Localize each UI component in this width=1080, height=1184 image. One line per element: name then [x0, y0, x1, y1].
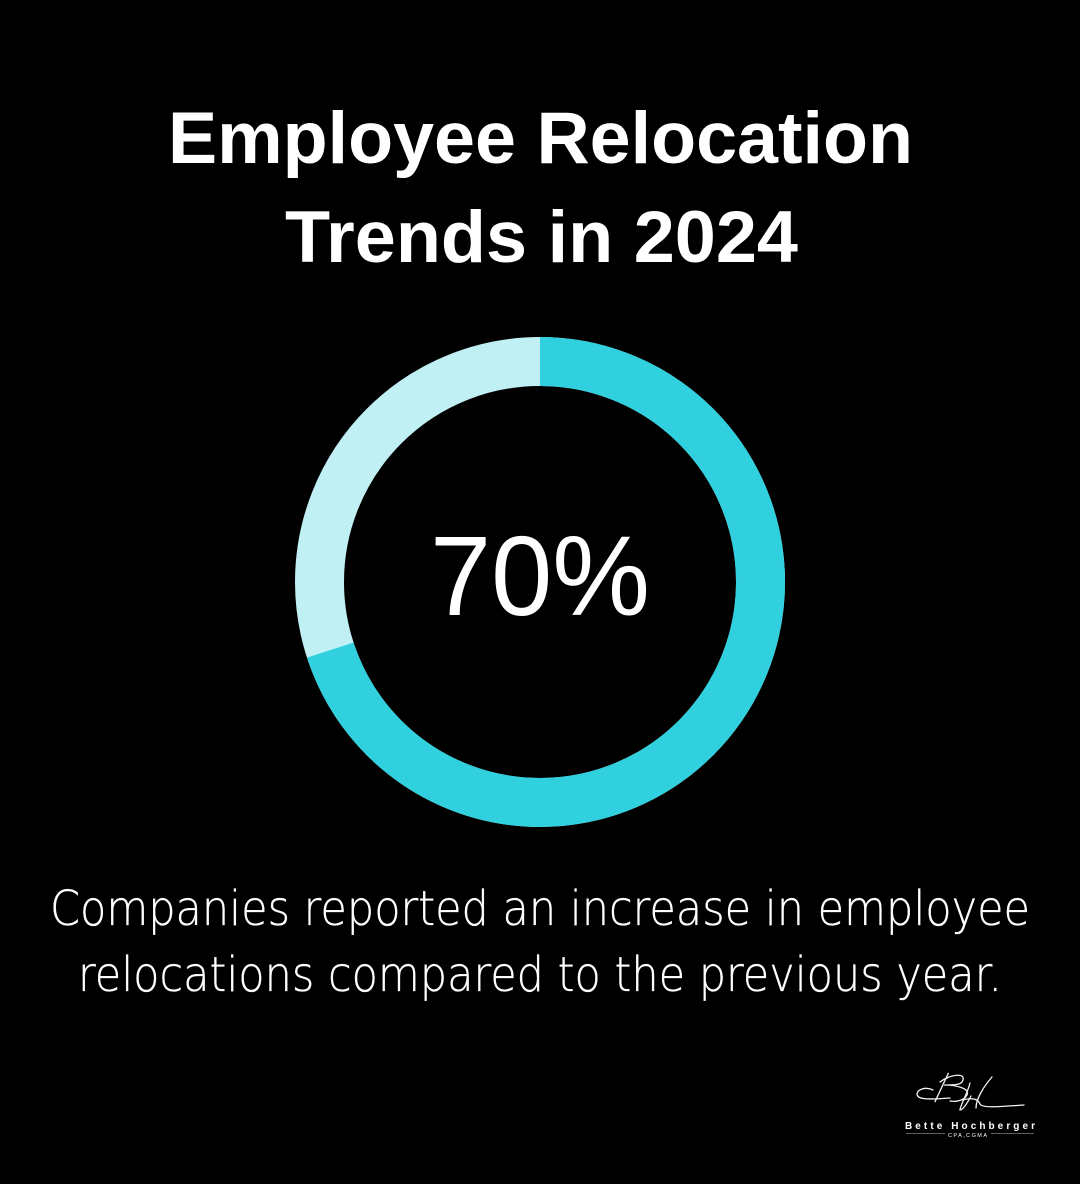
description text [50, 881, 1030, 1003]
logo: Bette Hochberger signature: Bette Hochberger [905, 1121, 1035, 1132]
title: Employee Relocation [168, 98, 913, 179]
logo: Bette Hochberger signature: CPA,CGMA [948, 1133, 987, 1139]
center value: 70% [430, 513, 650, 639]
logo: Bette Hochberger signature [905, 1073, 1035, 1139]
title [168, 98, 913, 278]
title: Trends in 2024 [285, 197, 798, 278]
description text: relocations compared to the previous year. [78, 947, 1002, 1003]
donut chart: 70% [320, 362, 761, 802]
